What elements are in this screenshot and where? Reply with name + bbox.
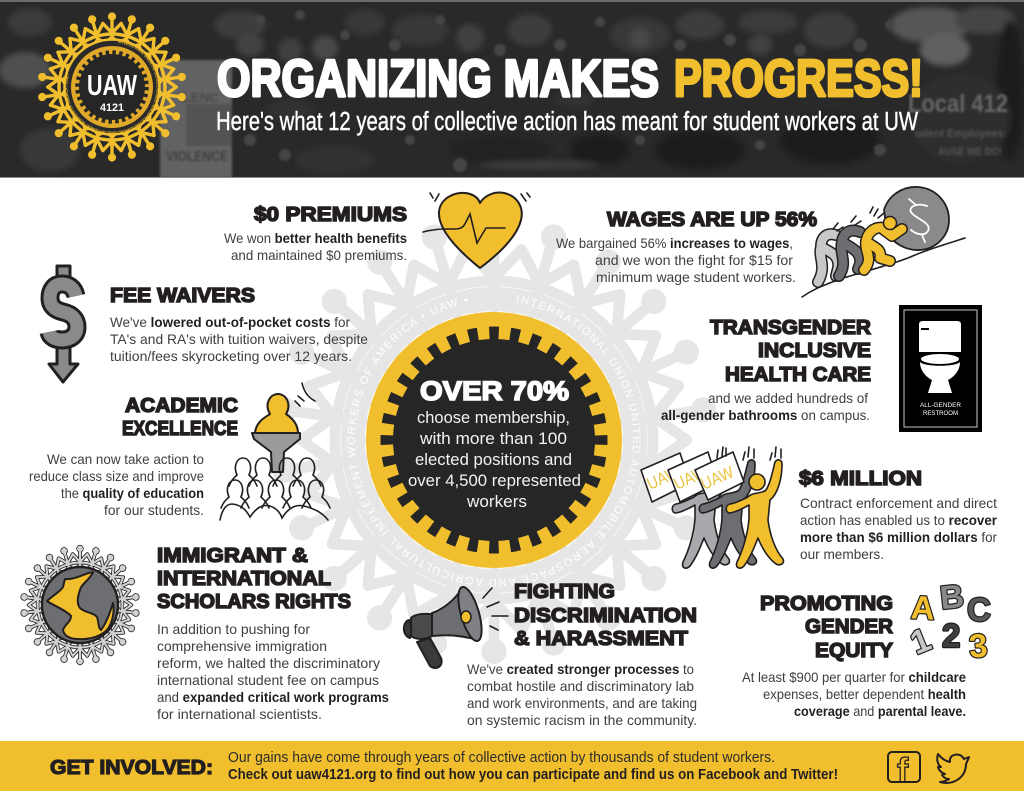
body text: the quality of education — [61, 485, 204, 501]
panel: $6 million — [641, 447, 998, 568]
body text: We've created stronger processes to — [467, 661, 694, 677]
heading: ACADEMIC — [125, 394, 238, 417]
panel: immigrant and international scholars rights — [21, 544, 389, 722]
footer heading: GET INVOLVED: — [50, 757, 213, 779]
heading: $0 PREMIUMS — [254, 203, 407, 226]
centre statistic: over 4,500 represented — [408, 472, 581, 490]
icon: letters and numbers: 3 — [968, 626, 989, 665]
UAW 4121 logo: UAW — [87, 70, 137, 102]
panel: wages are up — [556, 187, 965, 297]
body text — [742, 669, 966, 719]
body text: comprehensive immigration — [157, 638, 327, 654]
gear teeth — [387, 333, 601, 547]
heading: GENDER — [805, 615, 893, 638]
icon: all-gender restroom sign: RESTROOM — [923, 410, 958, 417]
body text: for our students. — [104, 502, 204, 518]
icon: letters and numbers: A — [910, 588, 936, 627]
body text: Contract enforcement and direct — [800, 495, 997, 511]
body text: We can now take action to — [47, 451, 204, 467]
body text: more than $6 million dollars for — [800, 529, 997, 545]
panel: fee waivers — [49, 266, 368, 382]
heading: INTERNATIONAL — [157, 567, 331, 590]
title: ORGANIZING MAKES — [217, 50, 659, 108]
body text: and maintained $0 premiums. — [231, 247, 407, 263]
icon: workers pushing boulder uphill — [802, 187, 965, 297]
heading: TRANSGENDER — [710, 316, 871, 339]
body text: combat hostile and discriminatory lab — [467, 678, 694, 694]
icon: dollar arrow — [49, 266, 78, 382]
footer: get involved — [0, 741, 1024, 791]
heading: IMMIGRANT & — [157, 544, 308, 567]
body text — [556, 235, 796, 285]
footer text — [228, 749, 838, 783]
body text — [661, 390, 870, 423]
heading: INCLUSIVE — [758, 339, 871, 362]
dark centre — [393, 339, 595, 541]
icon: letters and numbers: 1 — [905, 620, 936, 661]
heading — [710, 316, 871, 386]
icon: picketing workers with signs — [641, 447, 783, 568]
heading: $6 MILLION — [799, 467, 922, 490]
body text: We won better health benefits — [224, 230, 407, 246]
heading — [157, 544, 351, 613]
body text: and we won the fight for $15 for — [595, 252, 793, 268]
grey wheel of linked figures — [274, 221, 714, 659]
body text: At least $900 per quarter for childcare — [742, 669, 966, 685]
panel: $0 premiums — [224, 193, 530, 268]
panel: fighting discrimination and harassment — [404, 580, 697, 728]
heading — [122, 394, 238, 440]
icon: letters and numbers: B — [938, 577, 966, 616]
body text: coverage and parental leave. — [794, 703, 966, 719]
body text: action has enabled us to recover — [800, 512, 998, 528]
body text: In addition to pushing for — [157, 621, 310, 637]
heading: EXCELLENCE — [122, 417, 238, 440]
body text — [467, 661, 697, 728]
crowd photo background: VIOLENCE — [166, 148, 228, 165]
icon: facebook: f — [897, 752, 909, 790]
heading: PROMOTING — [760, 592, 893, 615]
crowd photo background: ILENC — [179, 90, 220, 105]
body text — [110, 314, 368, 364]
body text — [800, 495, 998, 562]
heading: FEE WAIVERS — [110, 284, 255, 307]
icon: picketing workers with signs: UAW — [644, 462, 683, 494]
centre statistic: elected positions and — [415, 451, 572, 469]
centre statistic — [408, 376, 581, 511]
body text: for international scientists. — [157, 706, 322, 722]
icon: globe in wheel — [21, 547, 139, 663]
header banner — [0, 0, 1024, 178]
icon: letters and numbers: 2 — [942, 617, 960, 654]
centre statistic: with more than 100 — [419, 430, 567, 448]
UAW 4121 logo: INTERNATIONAL UNION UNITED AUTOMOBILE AEROSPACE AND AGRICULTURAL IMPLEMENT WORKERS OF AMERICA • UAW • — [66, 41, 158, 134]
body text: expenses, better dependent health — [763, 686, 966, 702]
icon: picketing workers with signs: UAW — [698, 462, 737, 494]
body text: minimum wage student workers. — [596, 269, 796, 285]
body text: TA's and RA's with tuition waivers, despite — [110, 331, 368, 347]
central union wheel — [272, 224, 716, 664]
body text — [157, 621, 389, 722]
icon: twitter bird — [937, 754, 969, 783]
heading: SCHOLARS RIGHTS — [157, 590, 351, 613]
icon: heart with pulse — [423, 193, 530, 268]
body text: on systemic racism in the community. — [467, 712, 697, 728]
heading: FIGHTING — [514, 580, 615, 603]
icon: speaker at podium with audience — [220, 383, 330, 520]
icon: facebook — [888, 752, 920, 790]
body text: reform, we halted the discriminatory — [157, 655, 380, 671]
icon: all-gender restroom sign: ALL-GENDER — [920, 402, 961, 409]
centre statistic: OVER 70% — [420, 376, 569, 406]
heading — [760, 592, 893, 662]
heading: HEALTH CARE — [725, 363, 871, 386]
body text: and work environments, and are taking — [467, 695, 697, 711]
icon: letters and numbers: C — [967, 591, 991, 628]
panel: transgender inclusive health care — [661, 305, 982, 432]
body text: our members. — [800, 546, 884, 562]
yellow disc — [366, 312, 622, 568]
crowd photo background: udent Employees: — [915, 128, 1007, 140]
footer text: Check out uaw4121.org to find out how you can participate and find us on Facebook and Twitter! — [228, 766, 838, 783]
panel: academic excellence — [29, 383, 330, 520]
body text — [29, 451, 204, 518]
body text: tuition/fees skyrocketing over 12 years. — [110, 348, 352, 364]
heading: & HARASSMENT — [514, 627, 688, 650]
heading: WAGES ARE UP 56% — [607, 208, 817, 231]
heading: DISCRIMINATION — [514, 604, 697, 627]
body text: and expanded critical work programs — [157, 689, 389, 705]
footer text: Our gains have come through years of collective action by thousands of student workers. — [228, 749, 775, 766]
body text: We've lowered out-of-pocket costs for — [110, 314, 350, 330]
crowd photo background — [0, 0, 1024, 178]
wheel lettering: INTERNATIONAL UNION UNITED AUTOMOBILE AEROSPACE AND AGRICULTURAL IMPLEMENT WORKERS OF AMERICA • UAW • — [347, 296, 640, 586]
heading: EQUITY — [815, 639, 893, 662]
body text: and we added hundreds of — [708, 390, 868, 406]
icon: letters and numbers — [905, 577, 991, 665]
body text: international student fee on campus — [157, 672, 379, 688]
centre statistic: choose membership, — [417, 409, 570, 427]
panel: promoting gender equity — [742, 577, 991, 719]
title: PROGRESS! — [674, 50, 923, 108]
body text: all-gender bathrooms on campus. — [661, 407, 870, 423]
body text: reduce class size and improve — [29, 468, 204, 484]
centre statistic: workers — [466, 493, 527, 511]
body text: We bargained 56% increases to wages, — [556, 235, 793, 251]
icon: picketing workers with signs: UAW — [671, 462, 710, 494]
crowd photo background: AUSE WE DO! — [938, 146, 1002, 158]
UAW 4121 logo: 4121 — [100, 102, 124, 114]
UAW 4121 logo — [38, 12, 186, 162]
body text — [224, 230, 407, 263]
icon: megaphone — [404, 585, 508, 668]
heading — [514, 580, 697, 650]
crowd photo background: Local 412 — [908, 90, 1008, 118]
icon: all-gender restroom sign — [899, 305, 982, 432]
